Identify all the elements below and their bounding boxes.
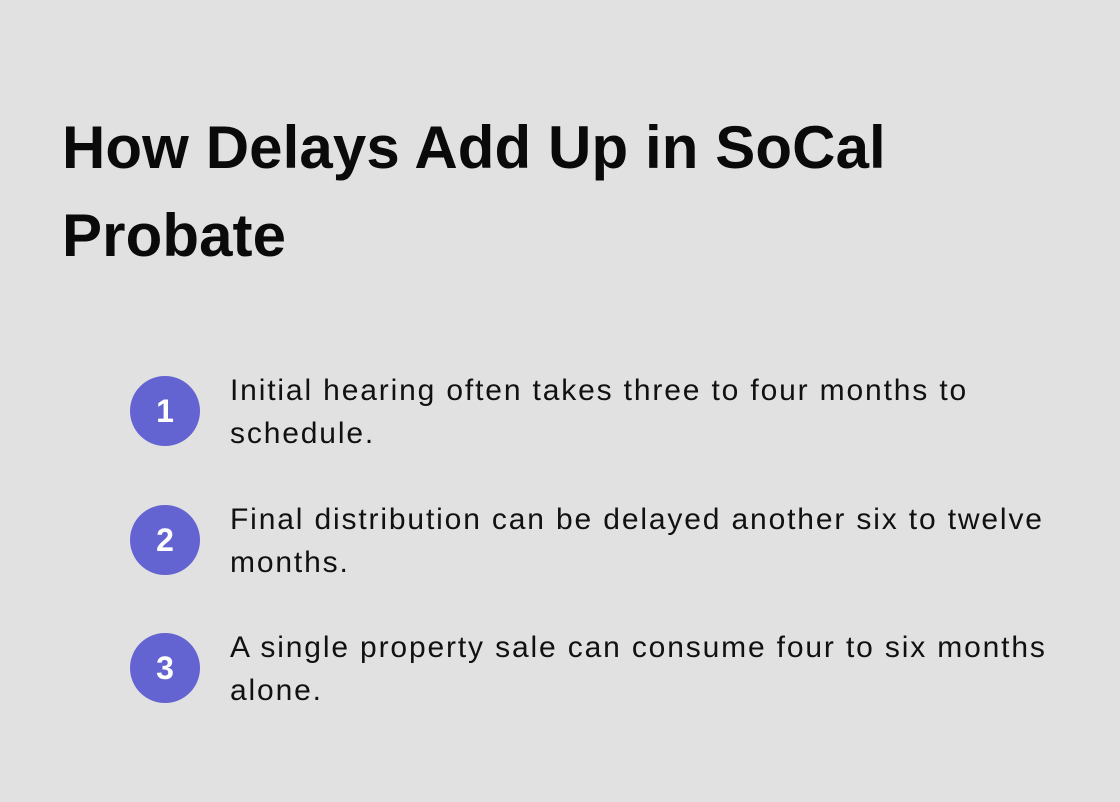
title: How Delays Add Up in SoCal [62, 114, 886, 181]
text: item 3: alone. [230, 674, 323, 707]
title: Probate [62, 202, 286, 269]
text: item 1: schedule. [230, 417, 375, 450]
icon: number 1 circle: 1 [156, 393, 174, 429]
text: item 3: A single property sale can consume four to six months [230, 631, 1047, 664]
icon: number 2 circle: 2 [156, 522, 174, 558]
text: item 2 [230, 503, 1044, 579]
text: item 2: months. [230, 546, 350, 579]
icon: number 2 circle [130, 505, 200, 575]
icon: number 3 circle: 3 [156, 650, 174, 686]
title [62, 114, 886, 269]
text: item 1: Initial hearing often takes three to four months to [230, 374, 968, 407]
icon: number 1 circle [130, 376, 200, 446]
item 2 [130, 503, 1044, 579]
text: item 2: Final distribution can be delayed another six to twelve [230, 503, 1044, 536]
item 1 [130, 374, 968, 450]
text: item 1 [230, 374, 968, 450]
text: item 3 [230, 631, 1047, 707]
icon: number 3 circle [130, 633, 200, 703]
item 3 [130, 631, 1047, 707]
